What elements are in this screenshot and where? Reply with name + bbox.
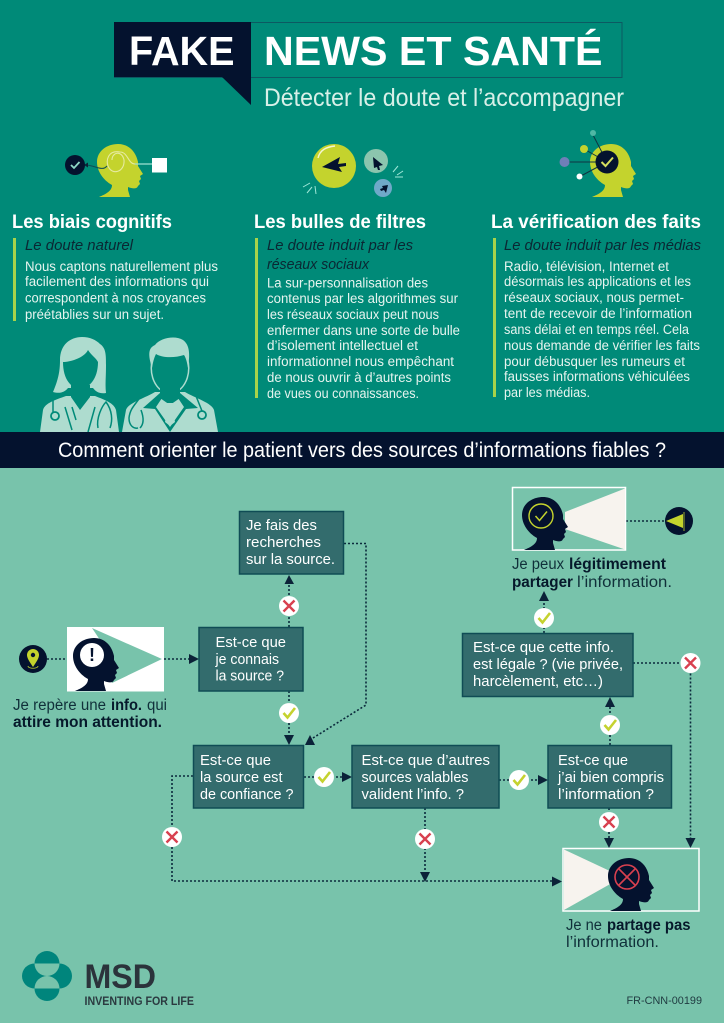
logo: MSD wordmark	[84, 958, 194, 1008]
subheading	[267, 238, 413, 273]
flow box: info légale: harcèlement, etc…)	[473, 673, 603, 690]
body text: de vues ou connaissances.	[267, 386, 419, 401]
title: FAKE: FAKE	[129, 28, 234, 74]
icon: head with tangled thoughts	[65, 144, 167, 197]
body text: enfermer dans une sorte de bulle	[267, 323, 460, 338]
flow box: recherches sur la source	[240, 512, 344, 574]
body text: tent de recevoir de l’information	[504, 306, 692, 321]
flow box: autres sources: valident l’info. ?	[362, 786, 464, 803]
subheading: Le doute induit par les	[267, 238, 413, 254]
flow box: source de confiance	[194, 746, 304, 808]
body text: Nous captons naturellement plus	[25, 259, 218, 274]
body text: d’isolement intellectuel et	[267, 338, 418, 353]
body text: fausses informations véhiculées	[504, 369, 690, 384]
body text: réseaux sociaux, nous permet-	[504, 290, 684, 305]
heading: Les biais cognitifs	[12, 212, 172, 233]
accent bar	[13, 238, 16, 321]
background: lower section	[0, 468, 724, 1023]
logo: MSD wordmark: MSD	[84, 958, 156, 996]
body text: informationnel nous empêchant	[267, 354, 454, 369]
title outline box	[114, 22, 622, 78]
body text: sans délai et en temps réel. Cela	[504, 322, 689, 337]
speech bubble: FAKE	[114, 22, 251, 105]
caption: je ne partage pas: l’information.	[566, 934, 659, 951]
flow box: je connais la source	[199, 628, 303, 691]
illustration: female doctor	[40, 337, 119, 432]
end node: flag	[665, 507, 693, 535]
caption: je ne partage pas: partage pas	[607, 917, 690, 934]
icon: filter bubbles	[303, 144, 403, 197]
marker: yes, confiance	[314, 767, 334, 787]
body text: Radio, télévision, Internet et	[504, 259, 669, 274]
flow box: je connais la source: la source ?	[216, 668, 284, 684]
illustration: head with exclamation	[68, 628, 164, 691]
caption: je ne partage pas: Je ne	[566, 917, 602, 934]
flow box: autres sources: Est-ce que d’autres	[362, 752, 490, 769]
flow box: bien compris	[548, 746, 672, 808]
caption: je ne partage pas	[566, 917, 690, 951]
logo: MSD wordmark: INVENTING FOR LIFE	[84, 996, 194, 1008]
illustration: head with exclamation: !	[89, 645, 95, 665]
caption: partager: partager	[512, 574, 573, 591]
body text: de nous ouvrir à d’autres points	[267, 370, 451, 385]
flow box: je connais la source: je connais	[215, 651, 279, 668]
body text	[504, 259, 700, 400]
marker: yes, connais	[279, 703, 299, 723]
subheading: réseaux sociaux	[267, 257, 370, 273]
flow box: info légale	[462, 634, 633, 696]
flow box: autres sources	[352, 746, 499, 808]
flow box: source de confiance: la source est	[200, 769, 283, 786]
flow box: autres sources: sources valables	[362, 769, 468, 786]
section banner	[0, 432, 724, 468]
caption: partager: légitimement	[569, 556, 666, 573]
body text: pour débusquer les rumeurs et	[504, 354, 685, 369]
caption: partager: Je peux	[512, 556, 564, 573]
flow box: recherches sur la source: Je fais des	[246, 517, 317, 534]
flow box: recherches sur la source: recherches	[246, 534, 321, 551]
flow box: bien compris: j’ai bien compris	[557, 769, 664, 786]
body text: contenus par les algorithmes sur	[267, 291, 458, 306]
title block	[114, 22, 624, 112]
flowchart connectors	[47, 521, 696, 886]
marker: no, légale	[680, 653, 700, 673]
caption: je repère une info: Je repère une	[13, 697, 106, 714]
marker: yes, légale	[534, 608, 554, 628]
body text	[25, 259, 218, 322]
start node: location pin	[19, 645, 47, 673]
heading: La vérification des faits	[491, 212, 701, 233]
marker: no, autres sources	[415, 829, 435, 849]
caption: partager: l’information.	[577, 574, 672, 591]
panel: les bulles de filtres	[254, 212, 460, 401]
caption: je repère une info: qui	[147, 697, 167, 714]
caption: partager	[512, 556, 672, 591]
flow box: info légale: Est-ce que cette info.	[473, 639, 614, 656]
marker: no, confiance	[162, 827, 182, 847]
section banner: Comment orienter le patient vers des sources d’informations fiables ?	[58, 439, 666, 462]
logo: MSD symbol	[22, 951, 72, 1001]
subheading: Le doute induit par les médias	[504, 238, 701, 254]
body text	[267, 276, 460, 401]
background: upper section	[0, 0, 724, 432]
illustration: head with check	[512, 488, 626, 550]
body text: par les médias.	[504, 385, 590, 400]
accent bar	[255, 238, 258, 398]
document reference: FR-CNN-00199	[626, 995, 702, 1007]
body text: facilement des informations qui	[25, 274, 209, 289]
illustration: head with cross	[563, 848, 699, 911]
marker: no, recherches	[279, 596, 299, 616]
body text: désormais les applications et les	[504, 274, 691, 289]
heading: Les bulles de filtres	[254, 212, 426, 233]
body text: les réseaux sociaux peut nous	[267, 307, 439, 322]
flow box: info légale: est légale ? (vie privée,	[473, 656, 623, 673]
body text: nous demande de vérifier les faits	[504, 338, 700, 353]
title: news et santé: NEWS ET SANTÉ	[264, 28, 602, 74]
body text: préétablies sur un sujet.	[25, 307, 164, 322]
illustration: male doctor	[122, 338, 218, 432]
caption: je repère une info	[13, 697, 167, 731]
accent bar	[493, 238, 496, 397]
marker: yes, compris	[600, 715, 620, 735]
flow box: bien compris: Est-ce que	[558, 752, 628, 769]
panel: les biais cognitifs	[12, 212, 218, 322]
panel: la vérification des faits	[491, 212, 701, 400]
flow box: source de confiance: Est-ce que	[200, 752, 271, 769]
flow box: bien compris: l’information ?	[558, 786, 654, 803]
flow box: source de confiance: de confiance ?	[200, 786, 294, 803]
subheading: Le doute naturel	[25, 238, 134, 254]
marker: yes, autres sources	[509, 770, 529, 790]
icon: head with fact check network	[560, 130, 636, 197]
flow box: je connais la source: Est-ce que	[216, 634, 286, 651]
caption: je repère une info: attire mon attention.	[13, 714, 162, 731]
body text: La sur-personnalisation des	[267, 276, 428, 290]
flow box: recherches sur la source: sur la source.	[246, 551, 335, 568]
marker: no, compris	[599, 812, 619, 832]
body text: correspondent à nos croyances	[25, 290, 206, 306]
subtitle: Détecter le doute et l’accompagner	[264, 84, 624, 112]
caption: je repère une info: info.	[111, 697, 142, 714]
